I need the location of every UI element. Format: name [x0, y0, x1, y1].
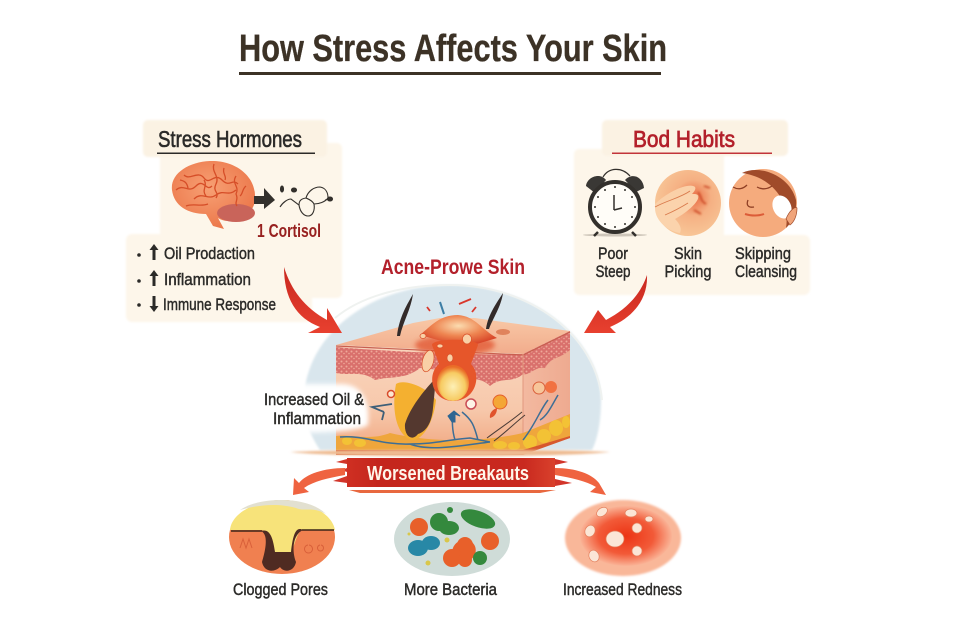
label: more bacteria: More Bacteria — [404, 580, 497, 599]
icon: skipping cleansing face — [729, 169, 797, 237]
dermis layer — [336, 347, 523, 386]
main pimple — [415, 335, 495, 355]
arrow: bad habits to skin — [584, 275, 647, 333]
label: skin picking: Skin — [674, 244, 702, 263]
blood vessels — [340, 395, 558, 448]
label: clogged pores: Clogged Pores — [233, 580, 328, 599]
heading: acne-prone skin: Acne-Prowe Skin — [381, 256, 525, 279]
banner: worsened breakouts — [290, 450, 610, 493]
banner: worsened breakouts: Worsened Breakauts — [367, 463, 529, 485]
list item: oil production: Oil Prodaction — [164, 244, 255, 263]
icon: cortisol molecule — [280, 186, 332, 216]
label: poor steep: Steep — [596, 262, 630, 281]
label: increased redness: Increased Redness — [563, 580, 682, 599]
panel: more bacteria — [394, 502, 510, 599]
icon: bacteria — [394, 502, 510, 576]
arrow: to more redness — [555, 468, 606, 495]
follicle and sebaceous gland — [394, 382, 436, 440]
icon: inflamed skin — [565, 500, 681, 576]
fat layer — [336, 414, 570, 453]
panel: increased redness — [563, 500, 682, 599]
heading: bod habits: Bod Habits — [633, 126, 735, 152]
callout: increased oil and inflammation — [255, 384, 368, 433]
label: skin picking — [664, 244, 712, 281]
panel: bad habits — [574, 120, 810, 295]
icon: skin picking — [655, 170, 721, 236]
arrow: brain to cortisol — [254, 188, 275, 209]
illustration: skin cross-section — [255, 285, 602, 455]
arrow: to clogged pores — [293, 468, 345, 495]
panel background — [126, 120, 342, 322]
icon: brain — [172, 161, 255, 229]
pain ticks — [427, 299, 476, 314]
backdrop dome — [304, 285, 602, 450]
label: poor steep: Poor — [598, 244, 628, 263]
label: skipping cleansing — [735, 244, 797, 281]
label: skin picking: Picking — [664, 262, 712, 281]
panel background — [574, 120, 810, 295]
arrow: stress hormones to skin — [284, 267, 342, 333]
title: How Stress Affects Your Skin — [239, 28, 667, 70]
callout: increased oil and inflammation: Inflammation — [273, 410, 361, 428]
label: skipping cleansing: Cleansing — [735, 262, 797, 281]
label: skipping cleansing: Skipping — [735, 244, 791, 263]
icon: alarm clock — [583, 169, 647, 236]
list item: inflammation: Inflammation — [164, 270, 251, 289]
panel: clogged pores — [229, 500, 335, 599]
panel: stress hormones — [126, 120, 342, 322]
skin block — [336, 293, 570, 455]
list item: immune response: Immune Response — [163, 295, 276, 314]
heading: stress hormones: Stress Hormones — [158, 126, 302, 152]
hairs — [397, 294, 413, 336]
label: 1 cortisol: 1 Cortisol — [257, 221, 321, 241]
list: hormone effects — [137, 244, 276, 314]
callout: increased oil and inflammation: Increased Oil & — [264, 391, 364, 409]
icon: clogged pore — [229, 500, 335, 574]
inflammation spots — [388, 329, 557, 418]
label: poor steep — [596, 244, 630, 281]
